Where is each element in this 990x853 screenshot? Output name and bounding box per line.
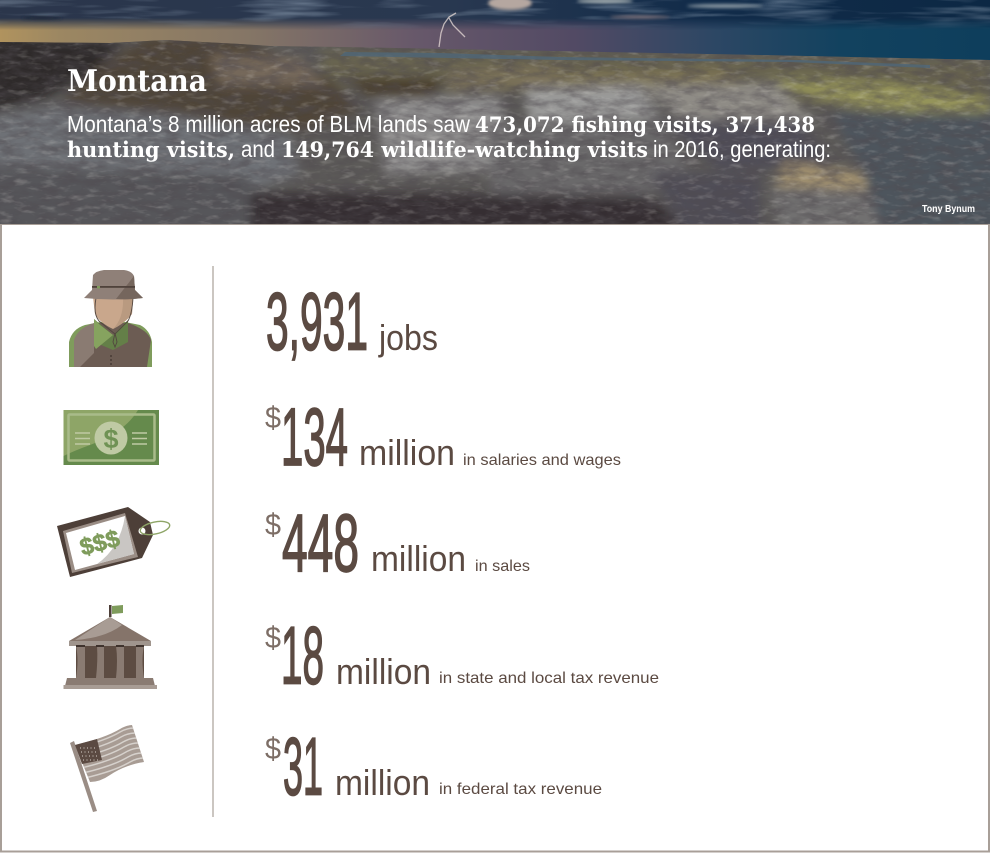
text block: intro paragraph: and [241,136,275,162]
stat: $18 million in state and local tax revenue: million [336,651,431,692]
text block: intro paragraph: 149,764 wildlife-watching visits [281,137,648,162]
stat: $448 million in sales: in sales [475,558,530,575]
heading: Montana: Montana [67,64,207,99]
photo credit: Tony Bynum: Tony Bynum [922,204,975,215]
stat: 3,931 jobs: 3,931 [266,276,368,368]
stat: $448 million in sales: million [371,538,466,579]
stat: 3,931 jobs: jobs [378,317,438,358]
icon: hunter with hat [69,270,152,367]
stat: $31 million in federal tax revenue: $ [265,731,281,766]
lightning bolt [439,13,465,47]
sky with storm clouds [0,0,990,62]
stat: $31 million in federal tax revenue: million [335,762,430,803]
stat: $18 million in state and local tax revenue: $ [265,620,281,655]
icon: dollar bill [64,410,159,465]
icon: price tag [57,507,171,577]
stat: $18 million in state and local tax revenue [265,610,659,702]
icon: price tag: $$$ [77,525,123,562]
horizon water [340,52,930,68]
icon: dollar bill: $ [103,424,119,454]
stat: $448 million in sales [265,498,530,589]
stat: $448 million in sales: 448 [282,498,359,589]
stat: $448 million in sales: $ [265,507,281,542]
icon: government building [64,605,157,689]
text block: intro paragraph: Montana’s 8 million acres of BLM lands saw [67,111,470,137]
stat: $18 million in state and local tax revenue: 18 [281,610,324,702]
stat: $134 million in salaries and wages: in salaries and wages [463,452,621,469]
stat: $31 million in federal tax revenue: in federal tax revenue [439,781,602,798]
stat: $134 million in salaries and wages: million [359,432,455,473]
text block: intro paragraph [67,111,831,162]
stat: $134 million in salaries and wages: 134 [281,392,348,483]
panel: white content background [1,224,989,852]
text block: intro paragraph: in 2016, generating: [653,136,831,162]
panel: header photo of Montana badlands [0,0,990,240]
badlands ground [0,40,990,224]
stat: $18 million in state and local tax revenue: in state and local tax revenue [439,670,659,687]
stat: $134 million in salaries and wages: $ [265,400,281,435]
text block: intro paragraph: 473,072 fishing visits, 371,438 [475,112,815,137]
strata texture [0,38,990,224]
icon: American flag [70,725,144,812]
text block: intro paragraph: hunting visits, [67,137,235,162]
stat: $134 million in salaries and wages [265,392,621,483]
stat: $31 million in federal tax revenue: 31 [283,722,323,812]
stat: $31 million in federal tax revenue [265,722,602,812]
